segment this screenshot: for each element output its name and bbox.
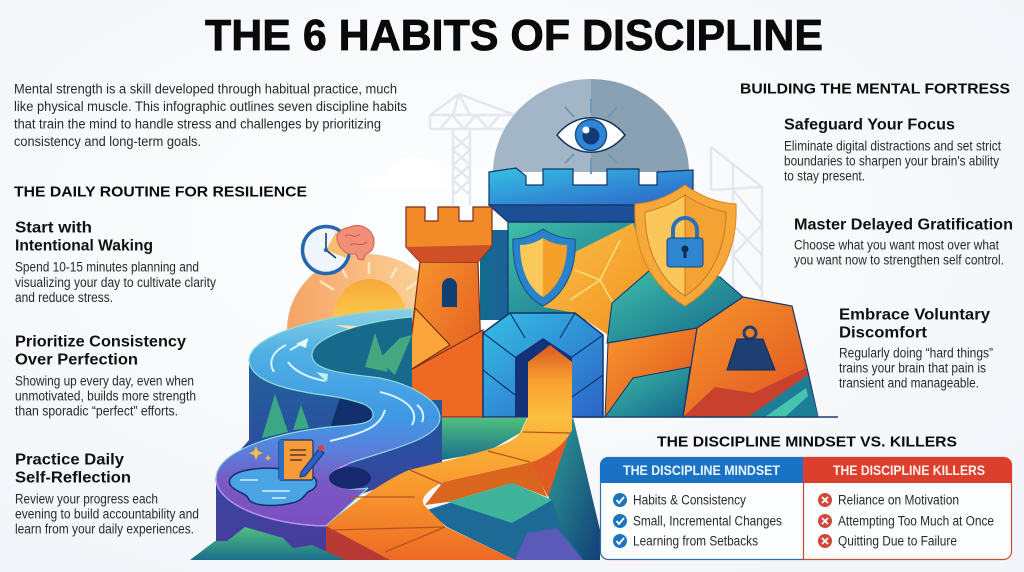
panel: discipline killers <box>803 457 1012 560</box>
habit: self-reflection <box>15 452 199 536</box>
orange road <box>326 417 572 560</box>
icon: large shield with lock <box>635 185 736 306</box>
comparison table <box>600 457 1012 560</box>
title: THE 6 HABITS OF DISCIPLINE <box>205 11 823 60</box>
habit: consistency: Showing up every day, even when <box>15 374 194 388</box>
inner valley with trees <box>262 317 412 438</box>
heading: the daily routine: THE DAILY ROUTINE FOR RESILIENCE <box>14 184 307 200</box>
habit: intentional waking: Start with <box>15 220 92 236</box>
intro text block: Mental strength is a skill developed through habitual practice, much <box>14 82 397 96</box>
panel: discipline mindset <box>600 457 803 560</box>
habit: delayed gratification <box>794 216 1013 268</box>
habit: voluntary discomfort: Discomfort <box>839 324 927 342</box>
icon: eye <box>557 118 625 152</box>
habit: voluntary discomfort <box>839 306 993 390</box>
icon: check <box>613 514 627 528</box>
rocks under the gate <box>442 417 600 560</box>
illustration: fortress and path <box>190 79 838 560</box>
icon: check <box>613 534 627 548</box>
rock: lower orange <box>605 328 697 417</box>
habit: voluntary discomfort: transient and manageable. <box>839 376 979 390</box>
habit: intentional waking: Spend 10-15 minutes planning and <box>15 260 199 274</box>
arch gate <box>483 313 603 417</box>
orange tower <box>406 207 492 417</box>
icon: cloud <box>355 157 450 188</box>
habit: delayed gratification: Choose what you want most over what <box>794 238 999 252</box>
ground line <box>575 416 838 418</box>
habit: voluntary discomfort: Embrace Voluntary <box>839 306 990 324</box>
icon: cross <box>818 493 832 507</box>
habit: consistency: unmotivated, builds more strength <box>15 388 196 404</box>
icon: cross <box>818 514 832 528</box>
dark notch below river <box>329 467 371 489</box>
sun <box>287 254 447 330</box>
habit: self-reflection: evening to build accountability and <box>15 506 199 522</box>
intro text block: like physical muscle. This infographic outlines seven discipline habits <box>14 99 407 114</box>
icon: small shield <box>513 229 575 306</box>
keep <box>508 222 652 335</box>
icon: padlock <box>667 218 703 267</box>
battlements <box>489 168 694 222</box>
habit: safeguard focus: Eliminate digital distractions and set strict <box>784 138 1001 154</box>
dome with eye <box>493 79 689 174</box>
purple rock <box>515 528 583 560</box>
icon: kettlebell weight <box>727 327 775 370</box>
orange wall under road <box>425 462 547 505</box>
panel: discipline mindset: THE DISCIPLINE MINDSET <box>623 462 780 478</box>
panel: discipline killers: Attempting Too Much at Once <box>838 514 994 528</box>
habit: intentional waking <box>15 220 216 305</box>
teal block rock <box>427 483 583 560</box>
habit: safeguard focus: to stay present. <box>784 168 865 184</box>
habit: consistency <box>15 334 196 418</box>
intro text block: that train the mind to handle stress and challenges by prioritizing <box>14 116 381 132</box>
icon: clock and brain <box>302 225 374 274</box>
habit: self-reflection: Self-Reflection <box>15 470 131 486</box>
winding river <box>216 309 440 526</box>
habit: intentional waking: and reduce stress. <box>15 290 113 305</box>
panel: discipline killers: Quitting Due to Failure <box>838 534 957 548</box>
icon: check <box>613 493 627 507</box>
left green mound <box>190 527 345 560</box>
panel: discipline mindset: Learning from Setbacks <box>633 534 758 548</box>
habit: consistency: Over Perfection <box>15 352 138 368</box>
icon: cross <box>818 534 832 548</box>
habit: delayed gratification: Master Delayed Gratification <box>794 216 1013 234</box>
panel: discipline mindset: Habits & Consistency <box>633 492 746 508</box>
intro text block <box>14 82 407 149</box>
habit: self-reflection: learn from your daily experiences. <box>15 522 194 536</box>
intro text block: consistency and long-term goals. <box>14 134 201 149</box>
habit: self-reflection: Practice Daily <box>15 452 124 468</box>
habit: intentional waking: Intentional Waking <box>15 238 153 254</box>
habit: safeguard focus: Safeguard Your Focus <box>784 116 955 134</box>
habit: consistency: than sporadic “perfect” efforts. <box>15 404 178 418</box>
habit: safeguard focus <box>784 116 1001 184</box>
heading: building the mental fortress: BUILDING THE MENTAL FORTRESS <box>740 80 1010 98</box>
habit: intentional waking: visualizing your day to cultivate clarity <box>15 275 216 290</box>
habit: voluntary discomfort: trains your brain that pain is <box>839 360 986 376</box>
heading: mindset vs killers: THE DISCIPLINE MINDSET VS. KILLERS <box>657 434 957 450</box>
habit: self-reflection: Review your progress each <box>15 492 158 506</box>
habit: consistency: Prioritize Consistency <box>15 334 186 350</box>
panel: discipline mindset: Small, Incremental Changes <box>633 514 782 528</box>
rock: big orange with weight <box>683 297 818 417</box>
icon: pond with notebook <box>229 440 324 505</box>
blue plateau wall <box>216 309 442 552</box>
icon: tower window <box>442 278 457 307</box>
habit: voluntary discomfort: Regularly doing “hard things” <box>839 346 993 360</box>
panel: discipline killers: THE DISCIPLINE KILLERS <box>833 462 985 478</box>
habit: safeguard focus: boundaries to sharpen your brain's ability <box>784 154 999 168</box>
rock: teal mid <box>607 270 743 343</box>
teal back wall <box>480 230 512 320</box>
panel: discipline killers: Reliance on Motivation <box>838 492 959 508</box>
icon: background cranes <box>430 94 762 300</box>
